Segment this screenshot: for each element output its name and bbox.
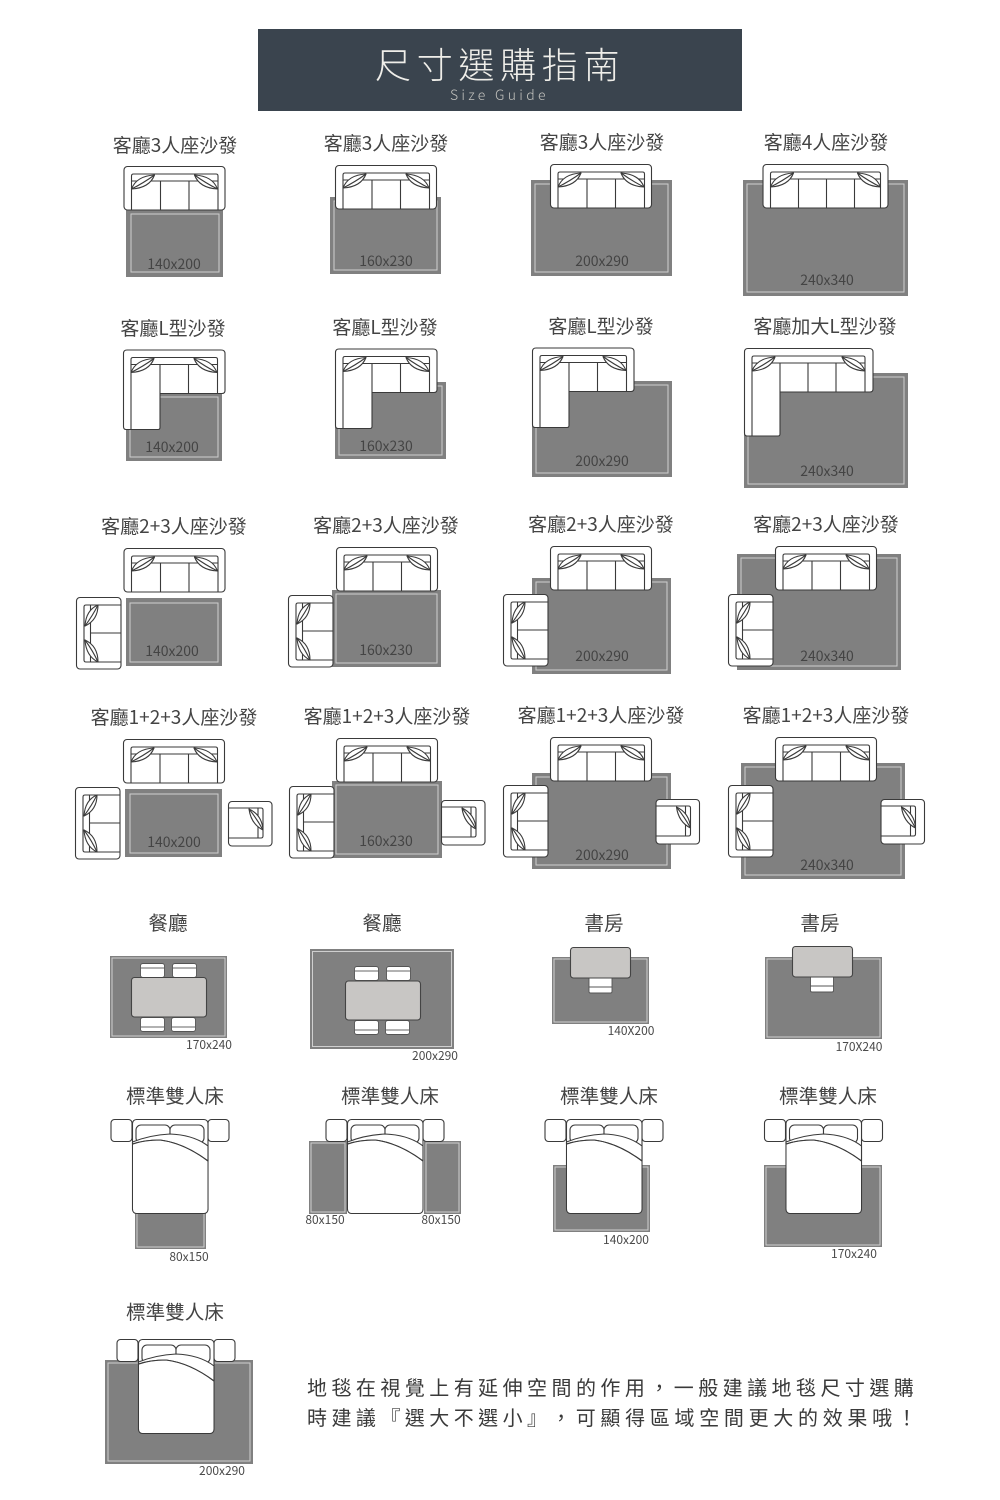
two-seat sofa	[728, 594, 773, 666]
three-seat sofa	[776, 738, 876, 781]
size label: 170x240	[186, 1036, 232, 1053]
rug	[532, 578, 671, 674]
rug	[531, 180, 672, 276]
size label: 140x200	[145, 437, 199, 457]
sofa	[763, 164, 888, 208]
size label: 160x230	[359, 251, 413, 271]
size label: 160x230	[359, 640, 413, 660]
size label: 160x230	[359, 831, 413, 851]
panel: living room 3-seat 200x290	[531, 128, 672, 276]
rug	[744, 373, 908, 488]
rug	[552, 957, 649, 1024]
size label: 240x340	[800, 270, 854, 290]
rug	[332, 781, 442, 858]
panel: living room 3-seat 160x230	[324, 129, 448, 274]
size label: 80x150	[169, 1248, 209, 1265]
size label: 140x200	[147, 832, 201, 852]
two-seat sofa	[288, 596, 333, 667]
title: 客廳1+2+3人座沙發	[304, 702, 470, 729]
panel: bed 80x150 at foot	[111, 1080, 229, 1265]
rug	[332, 590, 441, 667]
panel: study 140x200	[552, 907, 655, 1039]
rug	[125, 789, 222, 857]
rug	[743, 180, 908, 296]
panel: dining 200x290	[310, 907, 458, 1064]
panel: study 170x240	[765, 907, 883, 1055]
title: 客廳1+2+3人座沙發	[743, 701, 909, 728]
size label: 200x290	[199, 1462, 245, 1479]
rug	[737, 554, 901, 670]
rug	[532, 381, 672, 477]
L sofa	[124, 350, 225, 430]
panel: living room 4-seat 240x340	[743, 128, 908, 296]
two-seat sofa	[504, 786, 548, 857]
panel: extra-large L sofa 240x340	[744, 312, 908, 488]
right size label: 80x150	[421, 1211, 461, 1228]
size label: 200x290	[575, 451, 629, 471]
size label: 200x290	[575, 251, 629, 271]
subtitle: Size Guide	[450, 85, 549, 105]
bed	[764, 1120, 882, 1214]
header banner	[258, 29, 742, 111]
title: 客廳3人座沙發	[540, 128, 664, 155]
rug	[741, 763, 905, 879]
panel: 1+2+3 sofa 140x200	[76, 703, 272, 859]
panel: 2+3 sofa 160x230	[288, 511, 459, 667]
title: 客廳2+3人座沙發	[528, 510, 674, 537]
title: 客廳2+3人座沙發	[101, 512, 247, 539]
title: 客廳3人座沙發	[113, 131, 237, 158]
panel: 2+3 sofa 200x290	[504, 510, 674, 674]
panel: L sofa 200x290	[532, 312, 672, 477]
title: 標準雙人床	[126, 1080, 224, 1109]
left size label: 80x150	[305, 1211, 345, 1228]
L sofa	[532, 348, 634, 428]
rug	[330, 197, 441, 274]
panel: 2+3 sofa 140x200	[76, 512, 247, 669]
sofa	[550, 164, 652, 208]
title: 書房	[584, 907, 624, 936]
size label: 140x200	[145, 641, 199, 661]
rug	[135, 1210, 206, 1249]
main title: 尺寸選購指南	[375, 37, 625, 89]
panel: living room 3-seat 140x200	[113, 131, 237, 277]
title: 客廳4人座沙發	[764, 128, 888, 155]
panel: dining 170x240	[110, 907, 232, 1053]
sofa	[336, 166, 436, 209]
rug	[310, 949, 454, 1049]
text block: advice: 時建議『選大不選小』 ，可顯得區域空間更大的效果哦！	[307, 1402, 922, 1431]
panel: bed 170x240	[764, 1080, 882, 1262]
title: 書房	[800, 907, 840, 936]
size label: 140x200	[147, 254, 201, 274]
single sofa	[656, 800, 700, 844]
panel: bed 200x290	[105, 1296, 253, 1479]
title: 標準雙人床	[560, 1080, 658, 1109]
title: 標準雙人床	[126, 1296, 224, 1325]
title: 客廳2+3人座沙發	[313, 511, 459, 538]
title: 標準雙人床	[779, 1080, 877, 1109]
panel: 1+2+3 sofa 160x230	[290, 702, 485, 858]
panel: 1+2+3 sofa 200x290	[504, 701, 700, 869]
three-seat sofa	[124, 548, 225, 592]
title: 餐廳	[362, 907, 402, 936]
size label: 200x290	[412, 1047, 458, 1064]
bed	[545, 1120, 663, 1214]
bed	[117, 1340, 235, 1434]
size label: 140X200	[608, 1022, 655, 1039]
three-seat sofa	[550, 738, 652, 781]
rug	[126, 390, 222, 461]
desk and chair	[792, 946, 852, 992]
rug	[553, 1165, 650, 1232]
three-seat sofa	[336, 738, 438, 782]
L sofa	[744, 348, 873, 436]
three-seat sofa	[124, 740, 224, 783]
L sofa	[336, 349, 437, 428]
title: 客廳1+2+3人座沙發	[518, 701, 684, 728]
rug	[126, 598, 222, 666]
single sofa	[441, 800, 485, 845]
dining set	[132, 964, 206, 1032]
size label: 200x290	[575, 646, 629, 666]
single sofa	[228, 802, 272, 846]
rug	[126, 208, 223, 277]
size label: 170X240	[836, 1038, 883, 1055]
size label: 200x290	[575, 845, 629, 865]
three-seat sofa	[336, 548, 438, 591]
size label: 240x340	[800, 646, 854, 666]
two-seat sofa	[290, 786, 334, 858]
title: 客廳1+2+3人座沙發	[91, 703, 257, 730]
rug	[764, 1165, 882, 1247]
panel: L sofa 140x200	[120, 314, 226, 461]
panel: L sofa 160x230	[332, 313, 446, 459]
single sofa	[880, 800, 924, 844]
two-seat sofa	[728, 786, 773, 857]
left rug	[309, 1141, 347, 1214]
panel: bed 80x150 both sides	[305, 1080, 461, 1228]
panel: bed 140x200	[545, 1080, 663, 1248]
title: 客廳加大L型沙發	[753, 312, 897, 339]
title: 餐廳	[148, 907, 188, 936]
title: 客廳L型沙發	[548, 312, 654, 339]
bed	[326, 1120, 444, 1214]
panel: 2+3 sofa 240x340	[728, 510, 901, 670]
size label: 170x240	[831, 1245, 877, 1262]
rug	[335, 382, 446, 459]
two-seat sofa	[76, 598, 121, 669]
text block: advice: 地毯在視覺上有延伸空間的作用，一般建議地毯尺寸選購	[307, 1372, 918, 1401]
rug	[105, 1360, 253, 1464]
dining set	[346, 966, 420, 1034]
text block: advice	[307, 1372, 922, 1431]
size label: 140x200	[603, 1231, 649, 1248]
three-seat sofa	[550, 546, 652, 590]
size label: 240x340	[800, 855, 854, 875]
rug	[532, 773, 671, 869]
desk and chair	[570, 948, 630, 993]
size label: 160x230	[359, 436, 413, 456]
title: 客廳L型沙發	[332, 313, 438, 340]
title: 客廳2+3人座沙發	[753, 510, 899, 537]
two-seat sofa	[76, 788, 120, 859]
two-seat sofa	[504, 594, 548, 666]
title: 客廳3人座沙發	[324, 129, 448, 156]
three-seat sofa	[776, 546, 876, 590]
sofa	[124, 166, 225, 210]
size label: 240x340	[800, 461, 854, 481]
right rug	[424, 1141, 461, 1214]
rug	[110, 956, 227, 1038]
title: 標準雙人床	[341, 1080, 439, 1109]
rug	[765, 957, 882, 1039]
bed	[111, 1120, 229, 1214]
panel: 1+2+3 sofa 240x340	[728, 701, 924, 879]
title: 客廳L型沙發	[120, 314, 226, 341]
